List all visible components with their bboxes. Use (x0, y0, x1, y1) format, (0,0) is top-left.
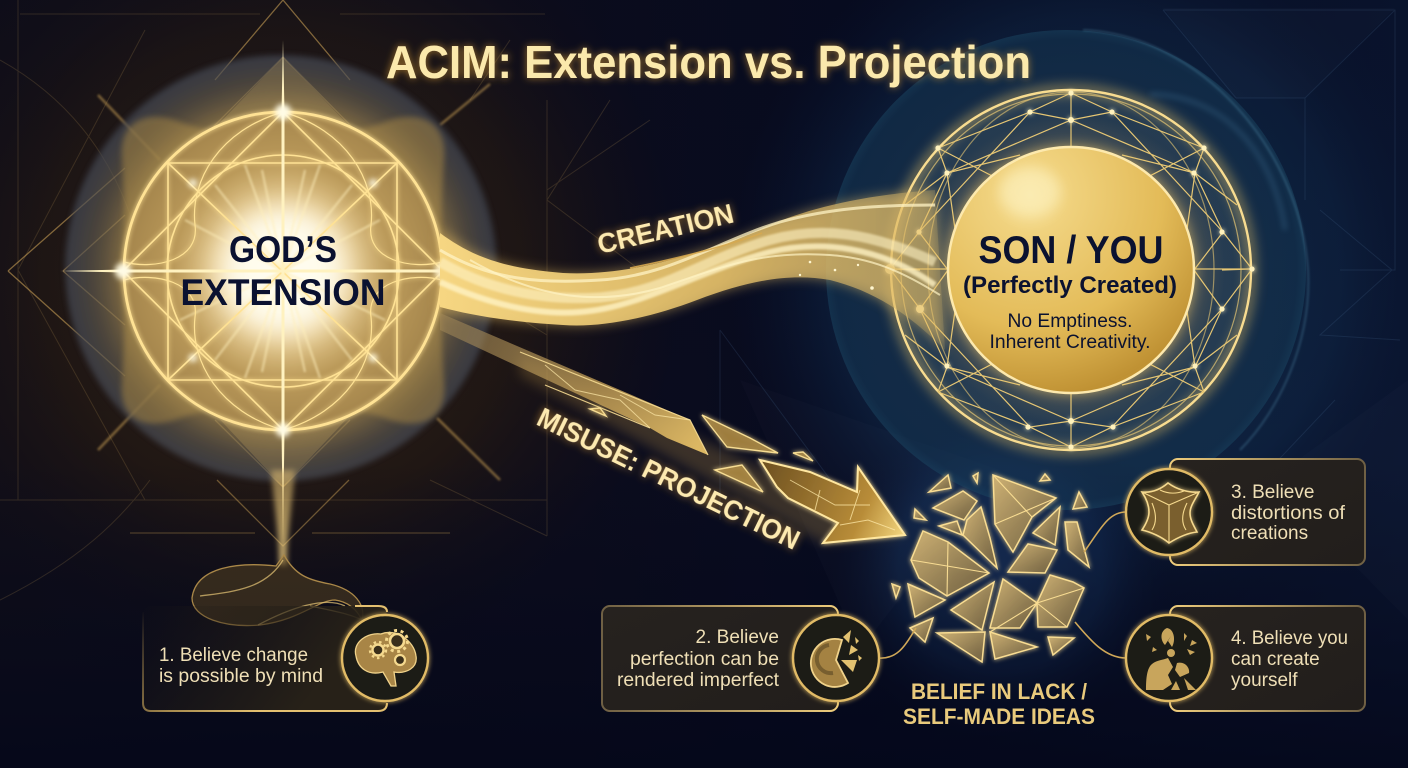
label: God's Extension: GOD’S (229, 229, 337, 270)
label: belief in lack (903, 679, 1095, 729)
label: Son / You (963, 229, 1177, 353)
card 2 text: rendered imperfect (617, 670, 780, 691)
creation stream (440, 190, 945, 350)
geometry (123, 112, 443, 430)
label: belief in lack: BELIEF IN LACK / (911, 679, 1087, 704)
disc: Son / You (947, 146, 1195, 394)
top and bottom star petals (211, 57, 355, 487)
broken pieces (590, 408, 813, 492)
card 3 text: distortions of (1231, 503, 1346, 524)
petals (116, 117, 450, 423)
card 4 text: yourself (1231, 670, 1298, 691)
card 1 text: 1. Believe change (159, 645, 308, 666)
beam intersections (115, 104, 451, 437)
label: Son / You: Inherent Creativity. (990, 332, 1150, 353)
card 4: believe you can create yourself (1126, 606, 1365, 711)
label: God's Extension (180, 229, 386, 313)
icon: brain with gears (342, 615, 428, 701)
icon: distorted cube (1126, 469, 1212, 555)
card 3: believe distortions of creations (1126, 459, 1365, 565)
label: creation: CREATION (594, 198, 737, 260)
card 2 text: 2. Believe (696, 627, 779, 648)
shattered crystal (892, 473, 1089, 662)
arrow head (760, 460, 905, 543)
shaft (440, 313, 708, 455)
haze (65, 55, 497, 481)
connectors from crystal to cards (878, 512, 1126, 658)
sphere: God's Extension (0, 0, 500, 545)
icon: fractured circle (793, 615, 879, 701)
label: God's Extension: EXTENSION (180, 272, 386, 313)
projection arrow (440, 313, 905, 543)
cage (885, 90, 1255, 450)
radiating rays (180, 165, 385, 378)
outer blue haze circle (826, 30, 1308, 510)
label: belief in lack: SELF-MADE IDEAS (903, 704, 1095, 729)
card 3 text: 3. Believe (1231, 482, 1314, 503)
arrow glow (520, 355, 905, 543)
card 2 text: perfection can be (630, 649, 779, 670)
title: ACIM: Extension vs. Projection (386, 36, 1031, 88)
card 4 text: can create (1231, 649, 1320, 670)
stem and swirl to belief 1 (192, 470, 372, 626)
card 1: believe change is possible by mind (143, 606, 428, 711)
icon: fractured person (1126, 615, 1212, 701)
outer diamond frame behind God's Extension (8, 0, 500, 546)
card 2: believe perfection can be rendered imperfect (602, 606, 879, 711)
label: Son / You: No Emptiness. (1008, 311, 1132, 332)
label: Son / You: SON / YOU (978, 229, 1164, 272)
card 1 text: is possible by mind (159, 666, 323, 687)
cross beams (0, 0, 500, 545)
card 3 text: creations (1231, 523, 1308, 544)
disc (123, 111, 443, 431)
sphere: Son / You with sacred-geometry cage (826, 30, 1308, 510)
card 4 text: 4. Believe you (1231, 628, 1348, 649)
cage nodes (885, 90, 1255, 450)
label: misuse projection: MISUSE: PROJECTION (532, 402, 805, 556)
label: Son / You: (Perfectly Created) (963, 272, 1177, 299)
